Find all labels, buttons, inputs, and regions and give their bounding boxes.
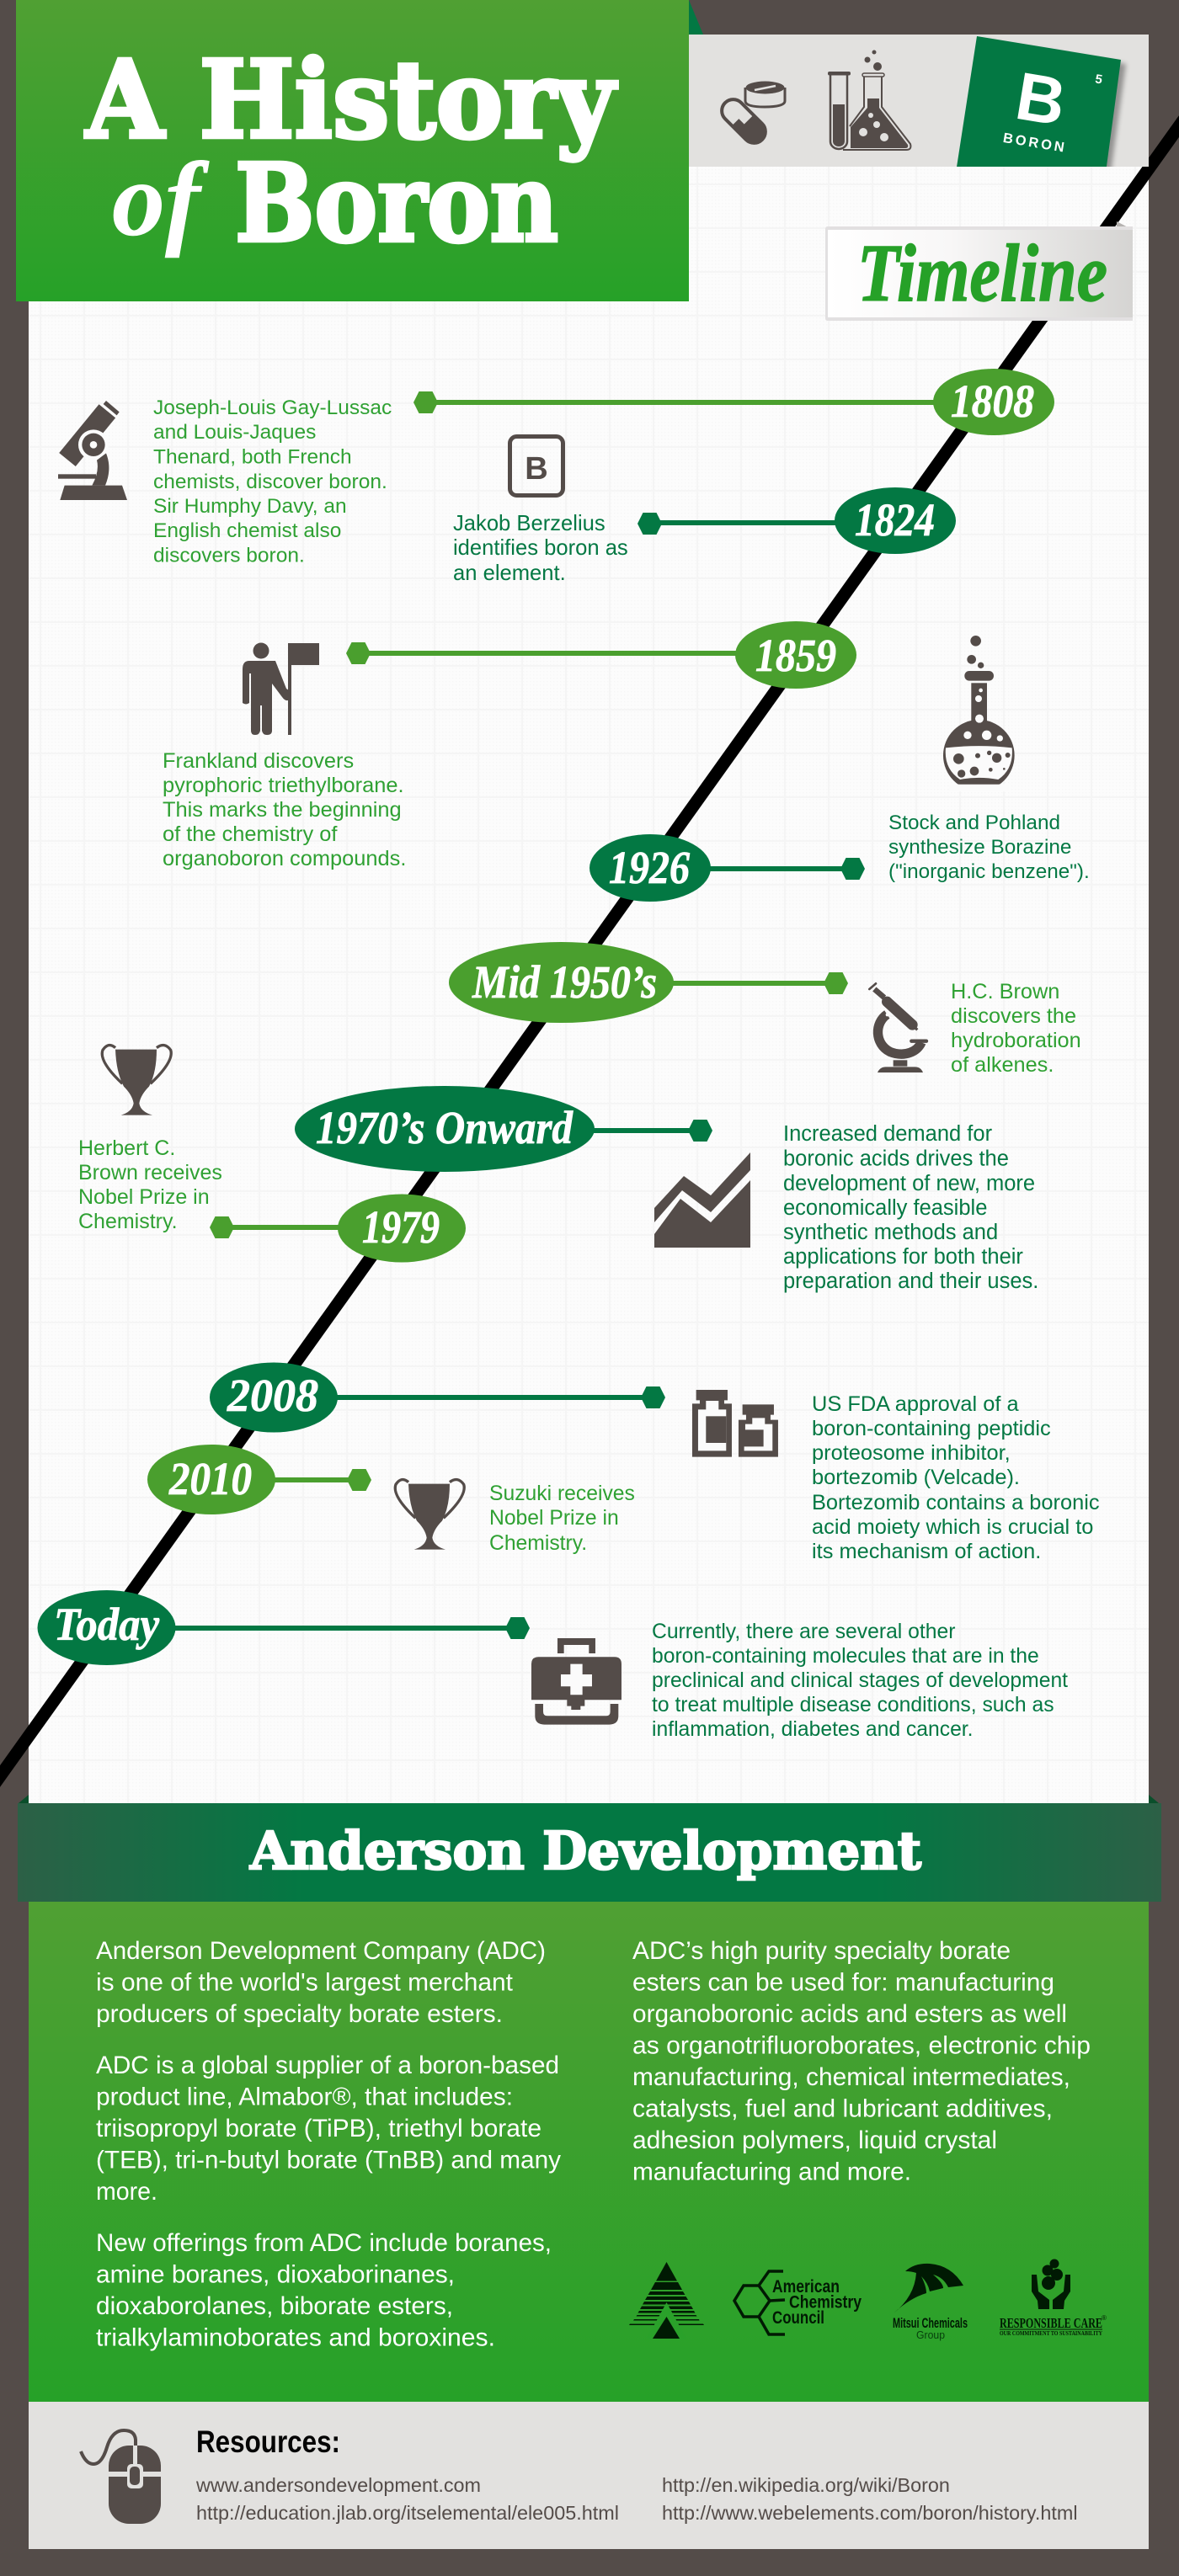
- title: of: [112, 141, 210, 258]
- logo: American Chemistry Council: American: [772, 2277, 840, 2297]
- text: company left column: New offerings from ADC include boranes,: [96, 2229, 552, 2257]
- text: 2008 FDA approval: proteosome inhibitor,: [812, 1441, 1011, 1465]
- icon: rising chart: [654, 1152, 750, 1248]
- milestone: 2008: 2008: [227, 1370, 318, 1421]
- logo: American Chemistry Council: [734, 2271, 862, 2334]
- text: company left column: amine boranes, dioxaborinanes,: [96, 2261, 455, 2288]
- logo: Anderson tree: [629, 2262, 704, 2339]
- text: 1950s discovery: of alkenes.: [951, 1053, 1054, 1077]
- text: 2008 FDA approval: US FDA approval of a: [812, 1392, 1019, 1416]
- icon: first aid kit: [531, 1638, 622, 1725]
- text: 1950s discovery: H.C. Brown: [951, 980, 1059, 1003]
- text: 2008 FDA approval: Bortezomib contains a boronic: [812, 1491, 1100, 1514]
- milestone: 2008: [210, 1362, 665, 1433]
- text: 1859 discovery: pyrophoric triethylborane.: [163, 774, 404, 797]
- icon: B element tile: B: [525, 451, 548, 487]
- milestone: 1824: 1824: [855, 494, 935, 546]
- icon: person with flag: [243, 643, 319, 735]
- milestone: 1979: 1979: [362, 1201, 440, 1253]
- text: 1808 discovery: Thenard, both French: [153, 446, 352, 468]
- text: 1824 discovery: an element.: [453, 562, 566, 585]
- text: 1970s demand: preparation and their uses.: [783, 1269, 1038, 1293]
- milestone: 1979: [210, 1194, 466, 1263]
- element card: boron: BORON: [1002, 130, 1068, 156]
- text: company right column: catalysts, fuel and lubricant additives,: [632, 2094, 1053, 2123]
- logo: Mitsui Chemicals Group: [893, 2264, 968, 2341]
- text: company right column: manufacturing, chemical intermediates,: [632, 2063, 1070, 2091]
- panel: Anderson Development green section: [29, 1902, 1149, 2402]
- text: company right column: manufacturing and more.: [632, 2158, 911, 2185]
- element card: boron: [956, 36, 1126, 173]
- text: 1808 discovery: discovers boron.: [153, 544, 305, 567]
- icon: trophy: [102, 1046, 171, 1115]
- text: company right column: esters can be used for: manufacturing: [632, 1968, 1054, 1997]
- milestone: 1970s onward: [295, 1086, 712, 1172]
- milestone: 2010: 2010: [168, 1453, 252, 1504]
- panel: resources: [29, 2402, 1149, 2549]
- milestone: today: [37, 1590, 530, 1665]
- heading: Anderson Development banner: Anderson Development: [249, 1820, 921, 1881]
- text: company left column: trialkylaminoborates and boroxines.: [96, 2323, 495, 2352]
- text: today: inflammation, diabetes and cancer.: [652, 1718, 974, 1741]
- text: company left column: product line, Almabor®, that includes:: [96, 2083, 513, 2111]
- text: today: to treat multiple disease conditions, such as: [652, 1694, 1054, 1716]
- heading: timeline banner: Timeline: [857, 228, 1107, 319]
- text: company left column: more.: [96, 2178, 157, 2206]
- icon: microscope: [58, 401, 127, 500]
- icon: B element tile: [510, 436, 563, 495]
- text: Herbert Brown Nobel: Chemistry.: [78, 1210, 178, 1233]
- text: company left column: producers of specialty borate esters.: [96, 2000, 503, 2028]
- text: Herbert Brown Nobel: Nobel Prize in: [78, 1185, 210, 1209]
- text: 1859 discovery: Frankland discovers: [163, 749, 354, 773]
- text: Herbert Brown Nobel: Herbert C.: [78, 1136, 175, 1160]
- icon: medicine bottles: [692, 1390, 778, 1457]
- text: company left column: Anderson Development Company (ADC): [96, 1937, 546, 1965]
- text: 1970s demand: boronic acids drives the: [783, 1147, 1009, 1170]
- text: 1970s demand: economically feasible: [783, 1196, 987, 1220]
- milestone: 1824: [638, 487, 956, 554]
- text: resource links left: www.andersondevelopment.com: [195, 2474, 481, 2496]
- text: 1808 discovery: and Louis-Jaques: [153, 421, 316, 444]
- milestone: 1970s onward: 1970’s Onward: [316, 1102, 573, 1153]
- text: today: preclinical and clinical stages of development: [652, 1669, 1068, 1692]
- text: 1808 discovery: chemists, discover boron.: [153, 471, 387, 493]
- text: 1970s demand: development of new, more: [783, 1172, 1035, 1195]
- milestone: 1859: [346, 621, 856, 689]
- logo: American Chemistry Council: Chemistry: [789, 2293, 862, 2312]
- text: Suzuki Nobel: Suzuki receives: [489, 1482, 635, 1505]
- element card: boron: 5: [1094, 72, 1103, 88]
- icon: computer mouse: [81, 2430, 161, 2524]
- text: 1808 discovery: Joseph-Louis Gay-Lussac: [153, 397, 392, 419]
- text: 2008 FDA approval: acid moiety which is crucial to: [812, 1515, 1093, 1539]
- milestone: 1859: 1859: [755, 630, 836, 681]
- text: company left column: (TEB), tri-n-butyl borate (TnBB) and many: [96, 2147, 561, 2174]
- text: company left column: triisopropyl borate (TiPB), triethyl borate: [96, 2115, 541, 2142]
- logo: Mitsui Chemicals Group: Mitsui Chemicals: [893, 2315, 968, 2331]
- text: company left column: [96, 1937, 561, 2352]
- fold triangle behind title: [689, 0, 703, 35]
- milestone: 2010: [147, 1445, 371, 1514]
- logo: Responsible Care: OUR COMMITMENT TO SUSTAINABILITY: [1000, 2330, 1102, 2337]
- logo: American Chemistry Council: Council: [772, 2308, 824, 2328]
- milestone: 1808: 1808: [951, 375, 1034, 427]
- text: Herbert Brown Nobel: Brown receives: [78, 1161, 222, 1184]
- milestone: mid 1950s: Mid 1950’s: [472, 956, 657, 1008]
- text: 1859 discovery: of the chemistry of: [163, 822, 338, 846]
- text: 1859 discovery: This marks the beginning: [163, 798, 402, 822]
- icon: round flask: [943, 636, 1015, 791]
- text: 1926 discovery: synthesize Borazine: [888, 836, 1071, 859]
- milestone: today: Today: [54, 1599, 160, 1650]
- text: resource links left: http://education.jlab.org/itselemental/ele005.html: [196, 2502, 619, 2524]
- text: 1950s discovery: discovers the: [951, 1004, 1076, 1028]
- icon: upright microscope: [869, 983, 926, 1072]
- icon: pills: [718, 81, 785, 147]
- text: 1950s discovery: hydroboration: [951, 1029, 1081, 1052]
- title: [85, 37, 617, 266]
- text: 1926 discovery: ("inorganic benzene").: [888, 860, 1090, 883]
- panel: timeline background: [29, 167, 1149, 1808]
- icon: test tube and flask: [828, 51, 910, 150]
- text: company right column: organoboronic acids and esters as well: [632, 2000, 1067, 2028]
- milestone: 1808: [413, 369, 1054, 435]
- logo: Responsible Care: ®: [1102, 2314, 1107, 2322]
- text: company right column: ADC’s high purity specialty borate: [632, 1937, 1011, 1965]
- milestone: mid 1950s: [449, 942, 848, 1023]
- text: company right column: adhesion polymers, liquid crystal: [632, 2126, 997, 2154]
- milestone: 1926: 1926: [609, 842, 690, 893]
- text: 1824 discovery: identifies boron as: [453, 536, 628, 560]
- text: company right column: [632, 1937, 1091, 2185]
- logo: Mitsui Chemicals Group: Group: [916, 2329, 945, 2341]
- text: 2008 FDA approval: its mechanism of action.: [812, 1540, 1041, 1563]
- text: resource links right: http://www.webelements.com/boron/history.html: [662, 2502, 1078, 2524]
- text: company left column: is one of the world's largest merchant: [96, 1968, 514, 1997]
- title: Boron: [235, 141, 558, 266]
- text: today: boron-containing molecules that are in the: [652, 1645, 1039, 1668]
- text: 1859 discovery: organoboron compounds.: [163, 847, 406, 870]
- text: 1970s demand: Increased demand for: [783, 1122, 993, 1146]
- heading: Anderson Development banner: [18, 1795, 1161, 1902]
- text: 1808 discovery: Sir Humphy Davy, an: [153, 495, 347, 518]
- text: company right column: as organotrifluoroborates, electronic chip: [632, 2032, 1091, 2059]
- text: resource links right: http://en.wikipedia.org/wiki/Boron: [662, 2474, 950, 2496]
- text: Suzuki Nobel: Chemistry.: [489, 1532, 587, 1555]
- timeline diagonal line: [0, 91, 1179, 1812]
- text: 2008 FDA approval: bortezomib (Velcade).: [812, 1466, 1020, 1489]
- panel: header icon strip: [689, 35, 1149, 173]
- text: 1808 discovery: English chemist also: [153, 519, 341, 542]
- text: 2008 FDA approval: boron-containing peptidic: [812, 1417, 1051, 1440]
- panel: title box: [16, 0, 689, 301]
- text: 1970s demand: applications for both their: [783, 1245, 1023, 1269]
- title: A History: [85, 37, 617, 162]
- text: company left column: ADC is a global supplier of a boron-based: [96, 2052, 559, 2079]
- milestone: 1926: [590, 834, 865, 902]
- element card: boron: B: [1011, 58, 1071, 140]
- text: 1926 discovery: Stock and Pohland: [888, 812, 1060, 834]
- text: 1970s demand: synthetic methods and: [783, 1221, 998, 1244]
- text: company left column: dioxaborolanes, biborate esters,: [96, 2292, 453, 2320]
- logo: Responsible Care: [1000, 2259, 1107, 2337]
- text: 1824 discovery: Jakob Berzelius: [453, 512, 606, 535]
- logo: Responsible Care: RESPONSIBLE CARE: [1000, 2315, 1102, 2331]
- icon: trophy: [395, 1480, 464, 1550]
- text: Suzuki Nobel: Nobel Prize in: [489, 1507, 619, 1530]
- text: today: Currently, there are several other: [652, 1621, 955, 1643]
- heading: resources: Resources:: [196, 2424, 340, 2459]
